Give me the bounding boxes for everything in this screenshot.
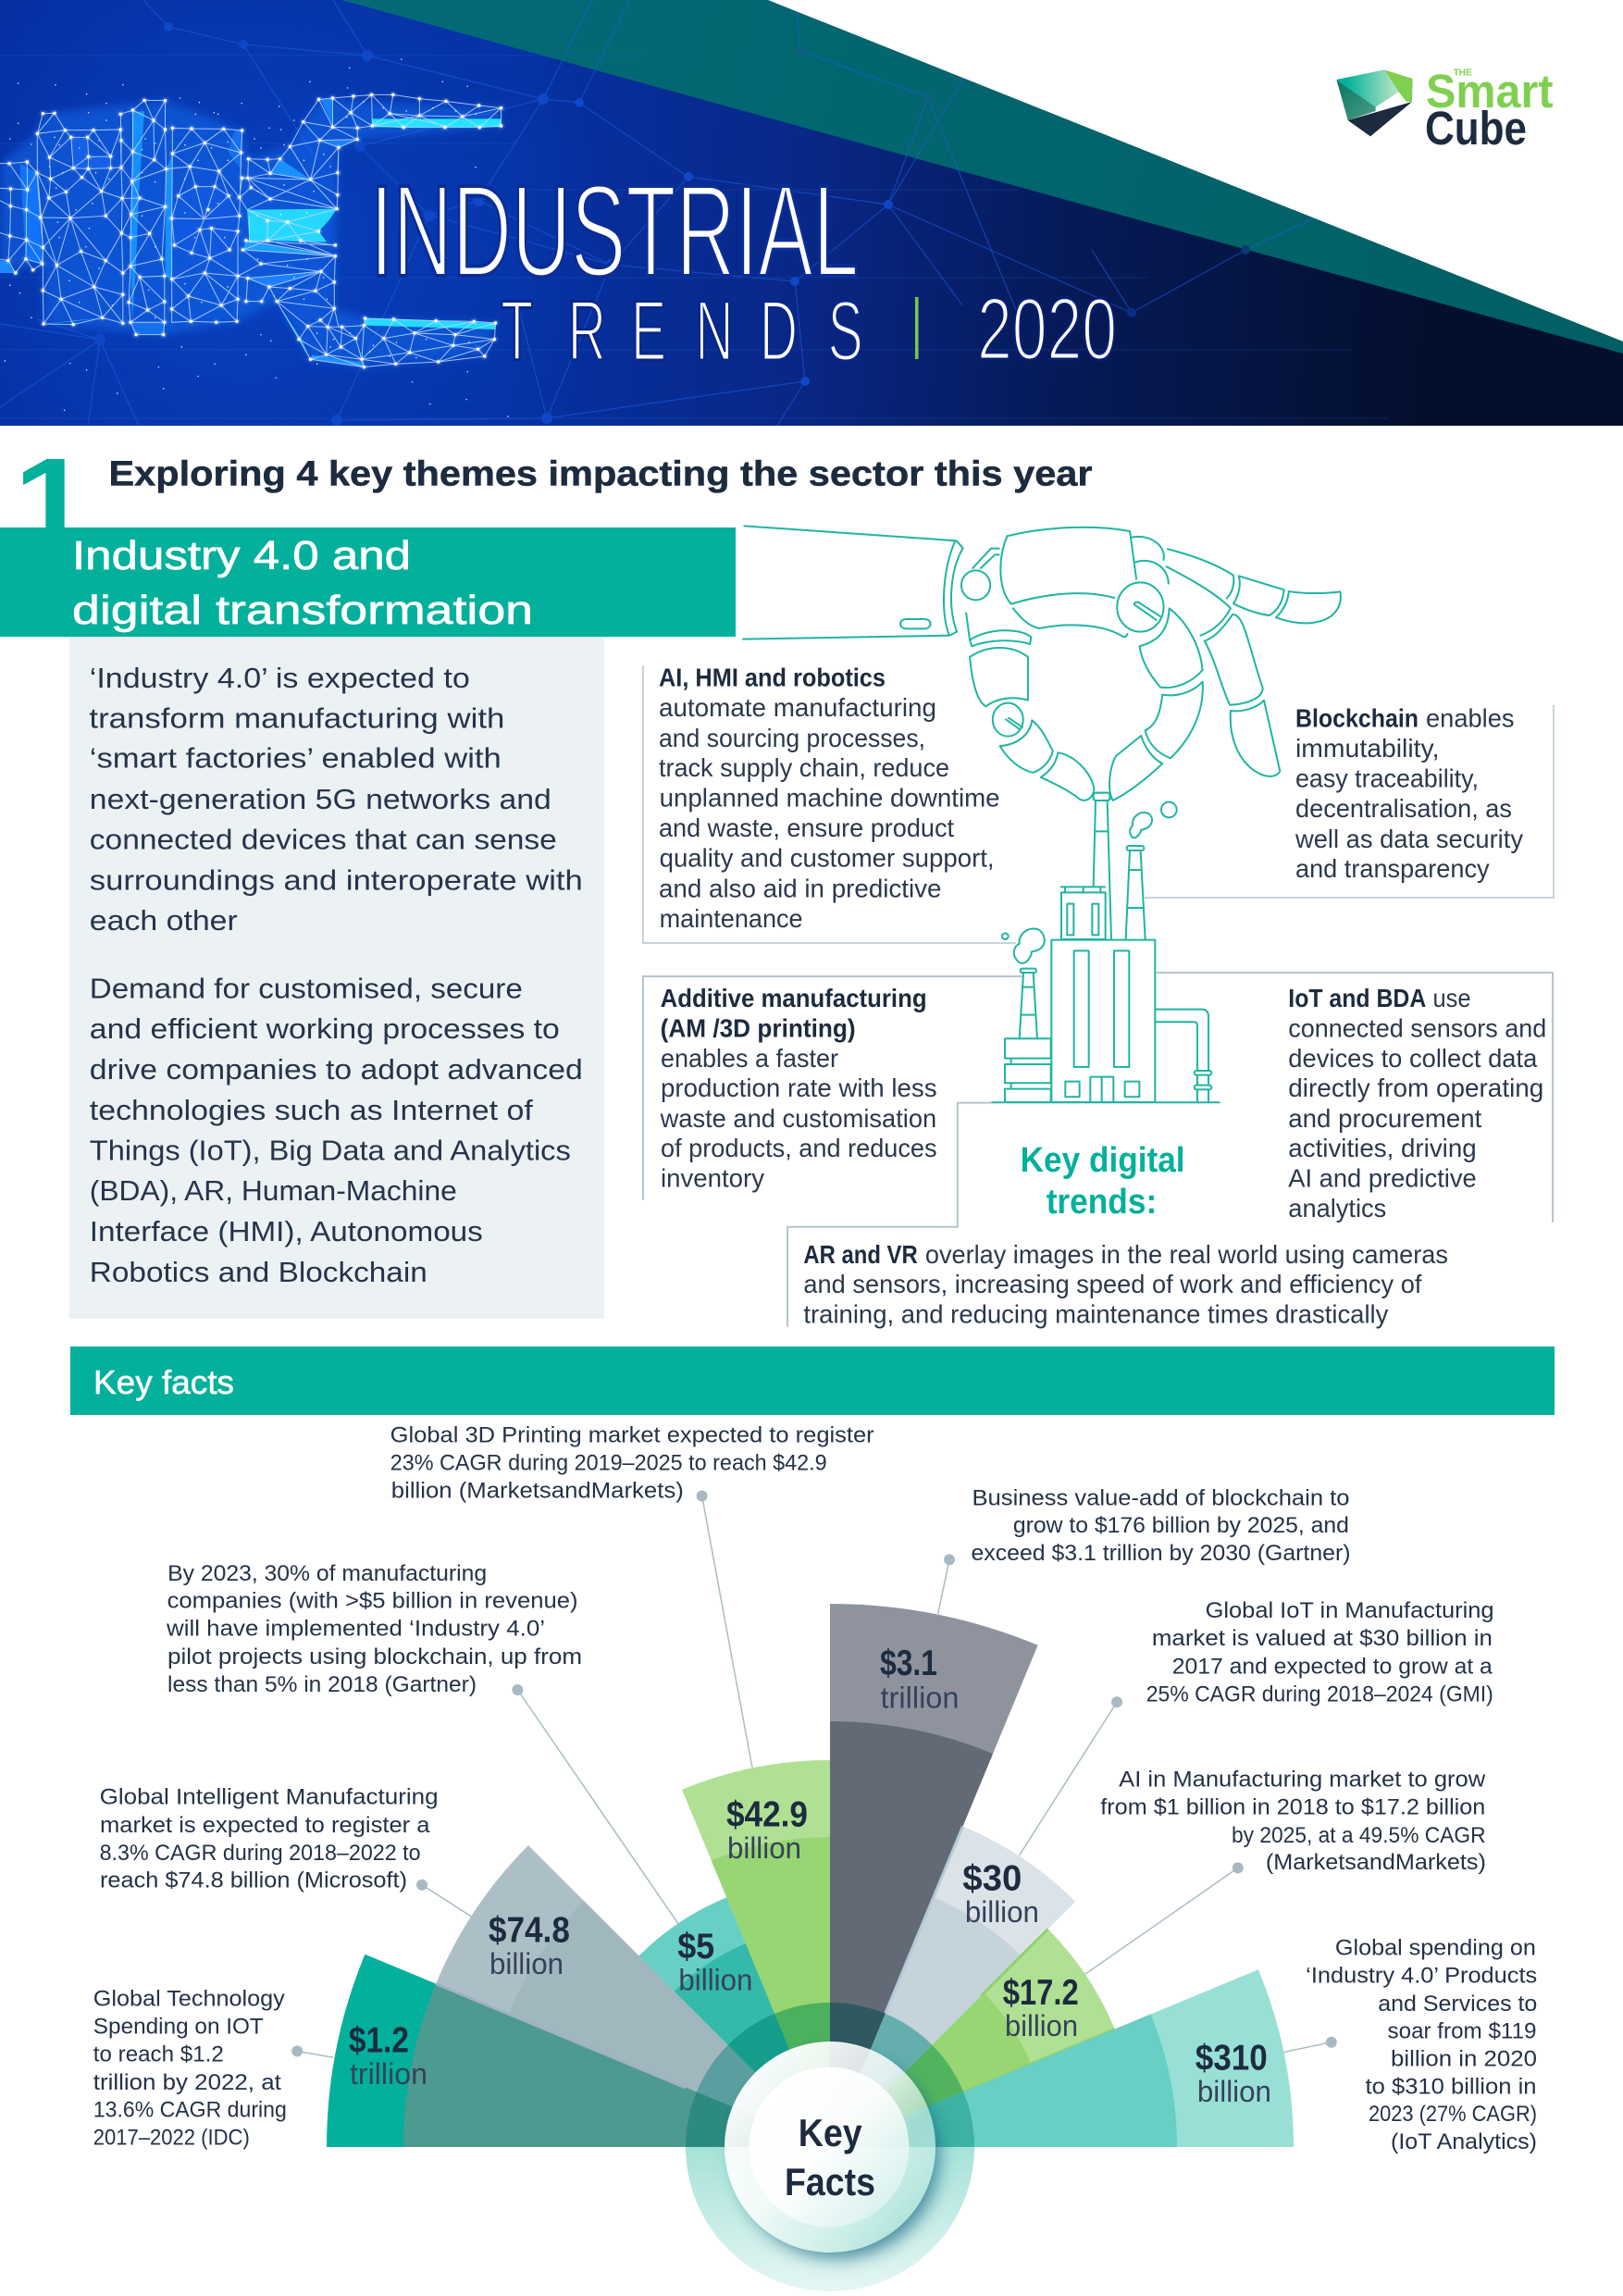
blockchain value text [972, 1485, 1351, 1566]
intro paragraph 2: technologies such as Internet of [90, 1094, 533, 1126]
IoT spending text: Global Technology [93, 1987, 286, 2012]
section number 1: 1 [14, 434, 90, 566]
AI manufacturing leader [1085, 1862, 1244, 1974]
AI manufacturing text: AI in Manufacturing market to grow [1119, 1768, 1486, 1792]
AI text: and also aid in predictive [659, 874, 942, 902]
callout: intelligent manufacturing [100, 1784, 471, 1917]
value: $17.2 billion: billion [1005, 2009, 1078, 2042]
value: $30 billion [962, 1858, 1039, 1929]
global spending text [1306, 1936, 1537, 2154]
AI text: AI, HMI and robotics [659, 663, 886, 691]
intro paragraph 1 [89, 662, 583, 937]
global spending text: billion in 2020 [1391, 2047, 1537, 2071]
AI panel line [643, 665, 1016, 943]
network nodes [94, 22, 1250, 426]
IoT spending leader [291, 2045, 333, 2057]
global spending text: soar from $119 [1388, 2019, 1536, 2044]
AR text: AR and VR [803, 1240, 918, 1269]
intro paragraph 2: drive companies to adopt advanced [90, 1053, 583, 1086]
IoT manufacturing leader [1020, 1696, 1122, 1855]
AI text: automate manufacturing [659, 693, 936, 722]
trend: IoT and BDA [1157, 973, 1553, 1222]
section heading band [0, 527, 736, 637]
blockchain panel line [1145, 705, 1554, 898]
IoT text: connected sensors and [1288, 1013, 1546, 1042]
pilots text [166, 1561, 582, 1697]
white top right corner [768, 0, 1623, 341]
blockchain text: Blockchain [1295, 704, 1419, 733]
value: $74.8 billion [489, 1911, 570, 1980]
AI manufacturing text: (MarketsandMarkets) [1266, 1850, 1486, 1875]
AI text: track supply chain, reduce [659, 753, 949, 782]
3D printing text [390, 1423, 874, 1503]
AI manufacturing text: by 2025, at a 49.5% CAGR [1232, 1823, 1486, 1848]
title: TRENDS: TRENDS [501, 284, 863, 379]
intro paragraph 2 [90, 972, 583, 1288]
value: $17.2 billion [1003, 1973, 1079, 2042]
blockchain text: well as data security [1295, 825, 1523, 853]
trend: blockchain [1145, 704, 1554, 898]
pilots text: will have implemented ‘Industry 4.0’ [166, 1616, 545, 1642]
value: $310 billion: $310 [1196, 2038, 1268, 2079]
intro paragraph 2: Demand for customised, secure [90, 972, 523, 1004]
icon: logo cube [1336, 69, 1413, 136]
AR panel line [787, 1103, 992, 1327]
intro paragraph 2: Interface (HMI), Autonomous [90, 1215, 483, 1247]
IoT spending text: 2017–2022 (IDC) [93, 2125, 250, 2150]
center label: Facts [785, 2160, 875, 2203]
IoT text [1288, 984, 1546, 1222]
IoT panel line [1157, 973, 1553, 1222]
blockchain value text: exceed $3.1 trillion by 2030 (Gartner) [972, 1541, 1351, 1566]
intro paragraph 2: Things (IoT), Big Data and Analytics [90, 1134, 571, 1166]
intro paragraph 1: next-generation 5G networks and [90, 783, 551, 815]
icon: glowing robot arm mesh [0, 59, 508, 416]
center ring [686, 2003, 974, 2291]
3D printing text: Global 3D Printing market expected to register [390, 1423, 874, 1448]
IoT text: directly from operating [1288, 1074, 1543, 1102]
value: $74.8 billion: billion [489, 1947, 564, 1980]
center inner disc [750, 2067, 909, 2227]
value: $310 billion: billion [1197, 2075, 1271, 2108]
value: $5 billion: $5 [677, 1927, 714, 1967]
AR text [803, 1240, 1448, 1329]
value: $310 billion [1196, 2038, 1271, 2108]
pilots text: By 2023, 30% of manufacturing [167, 1561, 487, 1586]
3D printing leader [697, 1490, 752, 1768]
intro paragraph 1: ‘smart factories’ enabled with [90, 741, 502, 774]
IoT manufacturing text: 25% CAGR during 2018–2024 (GMI) [1146, 1682, 1493, 1707]
blockchain text: easy traceability, [1295, 764, 1479, 792]
intro paragraph 1: ‘Industry 4.0’ is expected to [90, 662, 470, 694]
additive text: enables a faster [661, 1044, 838, 1073]
IoT spending text: trillion by 2022, at [93, 2070, 281, 2095]
blockchain text: immutability, [1295, 734, 1440, 763]
pilots text: less than 5% in 2018 (Gartner) [167, 1672, 477, 1697]
global spending text: 2023 (27% CAGR) [1369, 2102, 1537, 2127]
center disc shadow [736, 2054, 939, 2258]
intelligent manufacturing text: Global Intelligent Manufacturing [100, 1784, 439, 1810]
icon: robot hand [743, 526, 1341, 800]
global spending text: Global spending on [1335, 1936, 1536, 1960]
value: $3.1 trillion [880, 1644, 959, 1715]
AI text: maintenance [660, 904, 803, 933]
AI text [659, 663, 1000, 933]
sector: $3.1 trillion [830, 1604, 1038, 2147]
trend: additive manufacturing [643, 976, 1022, 1199]
intro background [69, 637, 604, 1319]
callout: IoT in manufacturing [1020, 1598, 1494, 1855]
scattered stars [5, 59, 508, 416]
value: $17.2 billion: $17.2 [1003, 1973, 1079, 2013]
blockchain text [1295, 704, 1523, 883]
blockchain text: and transparency [1295, 854, 1490, 883]
additive panel line [643, 976, 1022, 1199]
intelligent manufacturing text [100, 1784, 439, 1893]
key facts bar [70, 1347, 1555, 1415]
heading line 2: digital transformation [72, 588, 533, 633]
center label: Key [799, 2111, 862, 2154]
value: $42.9 billion: $42.9 [726, 1795, 808, 1835]
header banner [0, 0, 1623, 426]
intro paragraph 1: connected devices that can sense [90, 824, 557, 855]
value: $3.1 trillion: $3.1 [880, 1644, 937, 1683]
intro paragraph 1: each other [90, 904, 238, 937]
heading: key digital trends: trends: [1047, 1183, 1157, 1222]
value: $1.2 trillion [349, 2021, 427, 2091]
IoT text: activities, driving [1288, 1134, 1477, 1162]
additive text: (AM /3D printing) [661, 1013, 856, 1042]
IoT text: devices to collect data [1288, 1044, 1538, 1073]
logo: The Smart Cube [1336, 65, 1554, 155]
IoT spending text [93, 1987, 287, 2150]
global spending leader [1283, 2037, 1337, 2053]
AR text: and sensors, increasing speed of work and efficiency of [803, 1270, 1422, 1298]
AI text: unplanned machine downtime [660, 784, 1000, 813]
title: INDUSTRIAL: INDUSTRIAL [370, 157, 859, 304]
heading background [0, 527, 736, 637]
title divider [915, 297, 918, 359]
mesh nodes [8, 94, 502, 367]
IoT manufacturing text [1146, 1598, 1494, 1707]
value: $5 billion [677, 1927, 752, 1996]
additive text: production rate with less [661, 1074, 937, 1102]
additive text [660, 984, 937, 1193]
global spending text: ‘Industry 4.0’ Products [1306, 1963, 1537, 1988]
key facts background [70, 1347, 1555, 1415]
IoT spending text: Spending on IOT [93, 2014, 264, 2040]
additive text: of products, and reduces [661, 1134, 937, 1162]
value: $74.8 billion: $74.8 [489, 1911, 570, 1951]
AR text: overlay images in the real world using cameras [925, 1240, 1448, 1269]
IoT text: AI and predictive [1288, 1164, 1477, 1193]
trend: AI, HMI and robotics [643, 663, 1016, 943]
intelligent manufacturing text: reach $74.8 billion (Microsoft) [100, 1868, 407, 1893]
pilots text: companies (with >$5 billion in revenue) [167, 1589, 578, 1614]
intro paragraph 2: Robotics and Blockchain [90, 1256, 427, 1288]
teal diagonal band [341, 0, 1623, 354]
global spending text: and Services to [1378, 1992, 1537, 2017]
additive text: Additive manufacturing [661, 984, 927, 1012]
trend: AR and VR [787, 1103, 1448, 1329]
intro paragraph 1: surroundings and interoperate with [90, 864, 583, 897]
intelligent manufacturing text: 8.3% CAGR during 2018–2022 to [100, 1841, 421, 1866]
callout: 3D printing [390, 1423, 874, 1768]
value: $42.9 billion [726, 1795, 808, 1865]
intro paragraph 2: (BDA), AR, Human-Machine [90, 1174, 457, 1207]
background network lines [0, 0, 1406, 426]
blockchain text: decentralisation, as [1295, 794, 1512, 823]
callout: AI in manufacturing [1085, 1768, 1486, 1974]
callout: blockchain value [937, 1485, 1351, 1616]
IoT spending text: 13.6% CAGR during [93, 2098, 287, 2123]
AI text: and waste, ensure product [659, 813, 954, 842]
value: $3.1 trillion: trillion [881, 1682, 959, 1715]
heading: key digital trends [1021, 1141, 1185, 1222]
pilots leader [512, 1684, 678, 1924]
header background [0, 0, 1623, 426]
IoT manufacturing text: 2017 and expected to grow at a [1172, 1654, 1493, 1679]
chart: key facts fan [327, 1604, 1294, 2291]
header glow [0, 0, 740, 426]
additive text: inventory [661, 1164, 764, 1193]
sector: $5 billion [638, 1897, 830, 2147]
value: $1.2 trillion: $1.2 [349, 2021, 409, 2061]
AI manufacturing text: from $1 billion in 2018 to $17.2 billion [1100, 1794, 1485, 1819]
key facts heading: Key facts [93, 1363, 234, 1401]
value: $1.2 trillion: trillion [350, 2057, 427, 2091]
additive text: waste and customisation [660, 1104, 936, 1133]
blockchain value text: grow to $176 billion by 2025, and [1013, 1513, 1349, 1538]
IoT spending text: to reach $1.2 [93, 2042, 224, 2066]
3D printing text: billion (MarketsandMarkets) [391, 1478, 684, 1503]
blockchain value text: Business value-add of blockchain to [972, 1485, 1349, 1510]
IoT text: analytics [1288, 1194, 1386, 1222]
sector: $74.8 billion [436, 1845, 830, 2147]
value: $30 billion: billion [965, 1895, 1039, 1929]
sector: $1.2 trillion [327, 1955, 830, 2147]
heading line 1: Industry 4.0 and [72, 533, 411, 578]
value: $5 billion: billion [678, 1963, 752, 1996]
callout: IoT spending [93, 1987, 333, 2150]
IoT text: use [1432, 984, 1471, 1012]
blockchain text: enables [1426, 704, 1514, 733]
intro paragraph 2: and efficient working processes to [90, 1012, 560, 1045]
blockchain value leader [937, 1554, 955, 1616]
IoT manufacturing text: Global IoT in Manufacturing [1206, 1598, 1494, 1623]
icon: factory [991, 793, 1220, 1102]
AI text: quality and customer support, [660, 844, 995, 873]
value: $42.9 billion: billion [727, 1831, 801, 1865]
center disc [725, 2042, 935, 2253]
mesh lines [0, 94, 502, 367]
logo word: Cube: Cube [1425, 102, 1527, 155]
heading: key digital trends: Key digital [1021, 1141, 1185, 1180]
global spending text: to $310 billion in [1366, 2074, 1536, 2099]
center label [785, 2111, 875, 2203]
AI manufacturing text [1100, 1768, 1486, 1875]
3D printing text: 23% CAGR during 2019–2025 to reach $42.9 [390, 1450, 827, 1475]
sector: $30 billion [830, 1827, 1075, 2147]
mesh halo [0, 99, 502, 367]
IoT text: IoT and BDA [1288, 984, 1426, 1012]
AI text: and sourcing processes, [659, 724, 925, 752]
AR text: training, and reducing maintenance times drastically [803, 1300, 1389, 1329]
subtitle: Exploring 4 key themes impacting the sector this year [109, 455, 1093, 494]
title: 2020: 2020 [977, 280, 1117, 379]
callout: global spending [1283, 1936, 1537, 2154]
global spending text: (IoT Analytics) [1391, 2129, 1537, 2154]
sector: $310 billion [830, 1969, 1294, 2147]
panel: industry 4.0 intro [69, 637, 604, 1319]
intro paragraph 1: transform manufacturing with [89, 702, 504, 735]
IoT text: and procurement [1288, 1104, 1482, 1133]
intelligent manufacturing text: market is expected to register a [100, 1813, 430, 1838]
logo word: The: THE [1454, 68, 1472, 79]
IoT manufacturing text: market is valued at $30 billion in [1152, 1626, 1493, 1651]
sector: $42.9 billion [682, 1760, 830, 2147]
value: $30 billion: $30 [962, 1858, 1022, 1899]
pilots text: pilot projects using blockchain, up from [167, 1644, 582, 1669]
logo word: Smart: Smart [1426, 65, 1554, 118]
mesh facets [0, 98, 502, 367]
callout: Industry 4.0 pilots [166, 1561, 678, 1924]
sector: $17.2 billion [830, 1929, 1115, 2147]
intelligent manufacturing leader [416, 1880, 472, 1917]
